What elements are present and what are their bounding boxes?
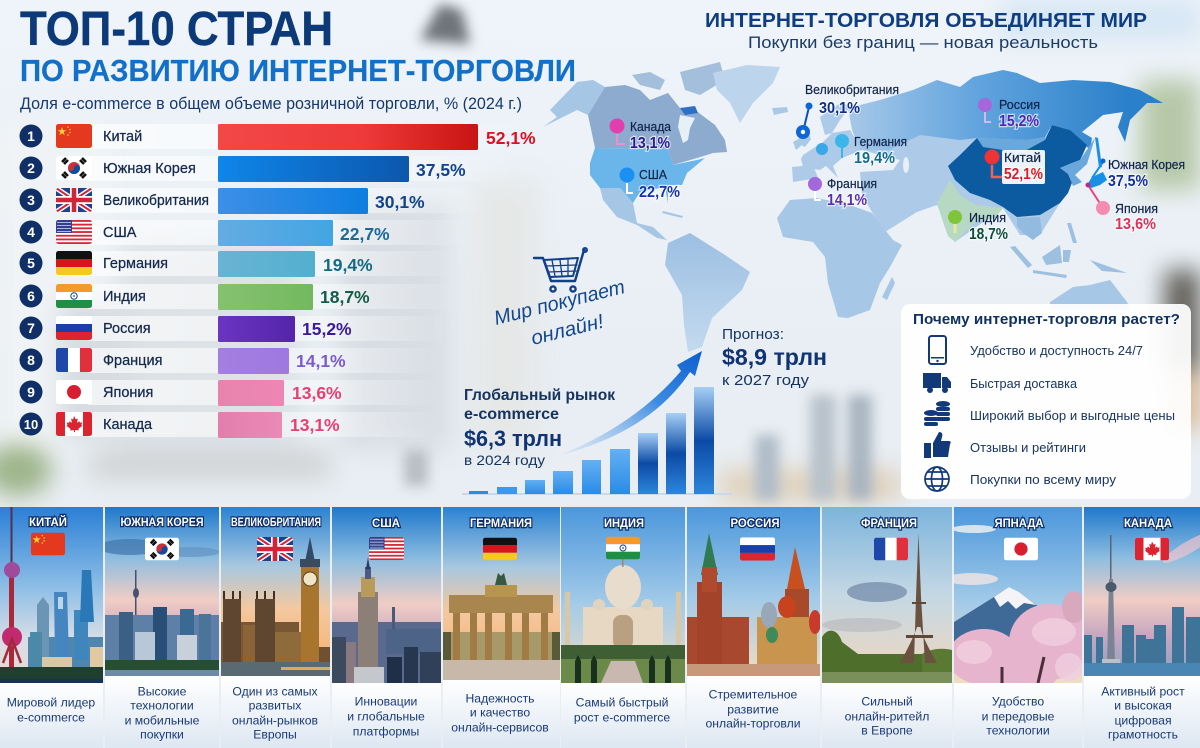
caption: грамотность: [1108, 728, 1178, 742]
caption: Высокие: [138, 684, 187, 698]
label: Canada: 13,1%: [630, 135, 670, 152]
Greenland: [713, 65, 780, 123]
row 7: Russia: 15,2%: [302, 319, 352, 339]
market size 2024: e-commerce: [464, 406, 559, 423]
label: UK: [805, 83, 899, 117]
caption: технологии: [130, 698, 194, 712]
reason 3: Широкий выбор и выгодные цены: [970, 408, 1175, 423]
pin: Canada: [610, 118, 625, 144]
label: USA: [639, 168, 680, 201]
caption: Надежность: [465, 692, 535, 706]
Mexico and Central America: [600, 188, 667, 240]
label: США: [372, 516, 400, 530]
caption: онлайн-ритейл: [845, 710, 929, 724]
handwritten slogan: Мир покупает: [492, 276, 627, 330]
row 10: Canada: 13,1%: [290, 415, 340, 435]
Australia: [1050, 280, 1130, 310]
growth arrow: [560, 351, 702, 455]
row 7: Russia: Россия: [103, 321, 151, 337]
row 6: India: [20, 284, 458, 310]
caption: [845, 694, 929, 738]
row 8: France: Франция: [103, 353, 162, 369]
row 5: Germany: Германия: [103, 256, 168, 272]
country card: France: [822, 507, 952, 748]
row 3: UK: [20, 188, 488, 214]
world map: [543, 62, 1163, 352]
South America: [665, 233, 750, 352]
icon: truck: [923, 373, 951, 393]
pin: UK: [796, 102, 812, 139]
icon: coins: [924, 401, 950, 426]
skyline: Moscow: [687, 507, 820, 676]
caption: и передовые: [982, 710, 1055, 724]
caption: [1101, 684, 1185, 742]
pin: Russia: [978, 98, 992, 122]
label: Russia: [999, 98, 1040, 130]
row 4: USA: США: [103, 225, 137, 241]
row 8: France: 8: [27, 352, 35, 368]
label: France: Франция: [827, 177, 877, 191]
label: Canada: [630, 120, 671, 152]
row 6: India: 6: [27, 288, 35, 304]
icon: globe: [925, 467, 949, 491]
label: USA: США: [639, 168, 668, 182]
row 2: South Korea: [20, 156, 518, 182]
label: India: Индия: [969, 211, 1006, 225]
row 5: Germany: [20, 251, 458, 277]
caption: [125, 684, 200, 742]
map subheading: Покупки без границ — новая реальность: [748, 34, 1098, 52]
row 9: Japan: 13,6%: [292, 383, 342, 403]
Iberia and Europe: [792, 130, 862, 182]
label: ФРАНЦИЯ: [861, 516, 917, 530]
Korea and Primorye: [1060, 138, 1095, 186]
skyline: Brandenburg Gate: [443, 507, 560, 680]
label: Germany: Германия: [854, 135, 907, 149]
label: ЮЖНАЯ КОРЕЯ: [120, 515, 204, 529]
caption: [347, 694, 425, 738]
caption: онлайн-сервисов: [451, 720, 549, 734]
country card: China: [0, 507, 103, 748]
flag: France: [874, 538, 908, 560]
label: China: Китай: [1004, 151, 1041, 165]
flag: USA: [369, 537, 404, 560]
caption: Сильный: [861, 694, 913, 708]
handwritten slogan: онлайн!: [529, 310, 606, 350]
icon: phone: [929, 336, 946, 364]
label: France: 14,1%: [827, 192, 867, 209]
icon: shopping cart: [534, 248, 587, 292]
caption: Инновации: [355, 694, 417, 708]
caption: и высокая: [1114, 698, 1172, 712]
Indonesia and Philippines: [1010, 223, 1127, 278]
row 10: Canada: Канада: [103, 417, 153, 433]
ranking bar chart: [20, 124, 536, 438]
flag: China: [31, 533, 65, 555]
Madagascar: [882, 277, 895, 300]
caption: цифровая: [1114, 714, 1172, 728]
row 5: Germany: 19,4%: [323, 255, 373, 275]
label: UK: Великобритания: [805, 83, 899, 97]
caption: [574, 696, 670, 724]
Asia base: [852, 130, 1087, 242]
pin: South Korea: [1092, 158, 1106, 178]
label: France: [827, 177, 877, 209]
caption: [451, 692, 549, 734]
USA: [590, 148, 705, 203]
Arctic islands: [632, 62, 725, 95]
label: ИНДИЯ: [604, 516, 644, 530]
row 7: Russia: 7: [27, 320, 35, 336]
China: [948, 125, 1087, 217]
caption: и качество: [470, 706, 530, 720]
flag: Germany: [483, 538, 517, 560]
label: ГЕРМАНИЯ: [470, 516, 532, 530]
row 6: India: 18,7%: [320, 287, 370, 307]
caption: в Европе: [861, 724, 913, 738]
caption: Самый быстрый: [576, 696, 668, 710]
caption: рост e-commerce: [574, 710, 670, 724]
caption: покупки: [140, 728, 184, 742]
label: Russia: Россия: [999, 98, 1040, 112]
Russia: [848, 70, 1163, 150]
flag: India: [606, 537, 640, 559]
label: South Korea: 37,5%: [1108, 173, 1148, 190]
caption: Активный рост: [1101, 684, 1185, 698]
caption: Европы: [253, 728, 297, 742]
row 4: USA: [20, 220, 478, 246]
Black Sea: [853, 159, 871, 167]
Scandinavia: [820, 102, 850, 135]
market size 2024: Глобальный рынок: [464, 387, 615, 404]
label: КАНАДА: [1124, 516, 1172, 530]
label: ВЕЛИКОБРИТАНИЯ: [231, 515, 321, 529]
map heading: ИНТЕРНЕТ-ТОРГОВЛЯ ОБЪЕДИНЯЕТ МИР: [705, 10, 1147, 32]
icon: thumbs up: [924, 432, 951, 458]
reason 4: Отзывы и рейтинги: [970, 440, 1086, 455]
label: Germany: 19,4%: [854, 150, 895, 167]
caption: онлайн-торговли: [705, 716, 801, 730]
Hudson lake mark: [680, 106, 698, 115]
row 3: UK: 3: [27, 192, 35, 208]
caption: Стремительное: [709, 688, 798, 702]
row 8: France: [20, 348, 438, 374]
label: UK: 30,1%: [819, 100, 860, 117]
forecast 2027: Прогноз:: [722, 326, 784, 343]
label: КИТАЙ: [29, 514, 67, 529]
row 9: Japan: Япония: [103, 385, 153, 401]
row 1: China: 52,1%: [486, 128, 536, 148]
pin: Japan: [1086, 182, 1110, 215]
label: South Korea: Южная Корея: [1108, 158, 1185, 172]
skyline: Paris: [822, 507, 952, 683]
reason 2: Быстрая доставка: [970, 376, 1078, 391]
country card: Japan: [946, 507, 1089, 748]
row 4: USA: 4: [27, 224, 35, 240]
skyline: Seoul: [105, 507, 219, 676]
label: South Korea: [1108, 158, 1185, 190]
country card: Russia: [687, 507, 821, 748]
market size 2024: [464, 387, 615, 468]
label: Germany: [854, 135, 907, 167]
caption: [7, 696, 95, 724]
India: [937, 180, 1003, 242]
Caspian Sea: [903, 157, 909, 173]
flag: South Korea: [145, 538, 179, 560]
Hudson Bay: [678, 115, 695, 143]
growth bar chart: [462, 387, 732, 495]
row 5: Germany: 5: [27, 255, 35, 271]
Iceland and UK: [772, 107, 811, 150]
label: Russia: 15,2%: [999, 113, 1039, 130]
country card: USA: [332, 507, 441, 748]
label: USA: 22,7%: [639, 184, 680, 201]
skyline: New York: [332, 507, 441, 683]
row 10: Canada: 10: [24, 417, 38, 432]
caption: развитых: [249, 698, 301, 712]
caption: Мировой лидер: [7, 696, 95, 710]
pin: India: [948, 210, 962, 233]
caption: и глобальные: [347, 710, 425, 724]
caption: платформы: [353, 724, 419, 738]
caption: развитие: [727, 702, 779, 716]
reason 5: Покупки по всему миру: [970, 472, 1117, 487]
panel: why e-commerce grows: [901, 304, 1191, 499]
caption: технологии: [986, 724, 1050, 738]
flag: Canada: [1135, 538, 1169, 560]
Caribbean: [662, 211, 683, 218]
skyline: Toronto: [1084, 507, 1200, 676]
pin: China: [984, 150, 1002, 177]
subtitle heading: ПО РАЗВИТИЮ ИНТЕРНЕТ-ТОРГОВЛИ: [20, 53, 576, 88]
label: China: 52,1%: [1004, 166, 1043, 183]
row 1: China: Китай: [103, 129, 142, 145]
row 7: Russia: [20, 316, 448, 342]
Alaska: [543, 80, 605, 127]
panel heading: Почему интернет-торговля растет?: [913, 311, 1180, 328]
row 4: USA: 22,7%: [340, 224, 390, 244]
row 3: UK: 30,1%: [375, 192, 425, 212]
label: ЯПНАДА: [994, 516, 1044, 530]
pin: Germany: [816, 134, 849, 158]
country card: India: [561, 507, 685, 748]
skyline: London: [221, 507, 330, 676]
caption: [982, 694, 1055, 738]
Japan: [1087, 137, 1107, 188]
chart caption: Доля e-commerce в общем объеме розничной торговли, % (2024 г.): [20, 94, 522, 113]
Canada: [588, 85, 727, 165]
skyline: Taj Mahal: [561, 507, 685, 683]
caption: [705, 688, 801, 730]
title: ТОП-10 СТРАН: [20, 3, 333, 56]
label: Japan: [1115, 202, 1158, 233]
caption: [232, 684, 318, 742]
forecast 2027: к 2027 году: [722, 372, 810, 389]
skyline: Fuji: [954, 507, 1082, 683]
country card: Canada: [1084, 507, 1200, 748]
caption: онлайн-рынков: [232, 714, 318, 728]
row 1: China: [20, 124, 536, 150]
flag: Russia: [740, 537, 775, 561]
label: Japan: 13,6%: [1115, 216, 1156, 233]
caption: Удобство: [992, 694, 1044, 708]
Mongolia: [977, 137, 1045, 152]
row 6: India: Индия: [103, 289, 146, 305]
country card: UK: [221, 507, 330, 748]
label: India: [969, 211, 1008, 243]
caption: и мобильные: [125, 714, 200, 728]
label: Japan: Япония: [1115, 202, 1158, 216]
reason 1: Удобство и доступность 24/7: [970, 343, 1143, 358]
market size 2024: в 2024 году: [464, 452, 545, 468]
country card: Germany: [443, 507, 560, 748]
forecast 2027: $8,9 трлн: [722, 344, 827, 370]
country card: South Korea: [98, 507, 220, 748]
label: India: 18,7%: [969, 226, 1008, 243]
row 2: South Korea: 37,5%: [416, 160, 466, 180]
row 1: China: 1: [27, 128, 35, 144]
South-East Asia: [1017, 217, 1042, 240]
row 10: Canada: [20, 412, 438, 438]
row 9: Japan: [20, 380, 438, 406]
label: Canada: Канада: [630, 120, 671, 134]
Africa: [777, 198, 902, 318]
skyline: Shanghai: [0, 507, 103, 683]
flag: Japan: [1004, 538, 1038, 560]
pin: France: [808, 177, 822, 200]
label: China: [1002, 150, 1045, 184]
forecast 2027: [722, 326, 827, 389]
market size 2024: $6,3 трлн: [464, 426, 562, 451]
row 9: Japan: 9: [27, 384, 35, 400]
pin: USA: [620, 168, 634, 193]
row 2: South Korea: Южная Корея: [103, 161, 196, 177]
row 2: South Korea: 2: [27, 160, 35, 176]
row 3: UK: Великобритания: [103, 193, 209, 209]
row 8: France: 14,1%: [296, 351, 346, 371]
caption: e-commerce: [17, 710, 85, 724]
caption: Один из самых: [232, 684, 318, 698]
flag: UK: [257, 537, 293, 561]
label: РОССИЯ: [730, 516, 780, 530]
